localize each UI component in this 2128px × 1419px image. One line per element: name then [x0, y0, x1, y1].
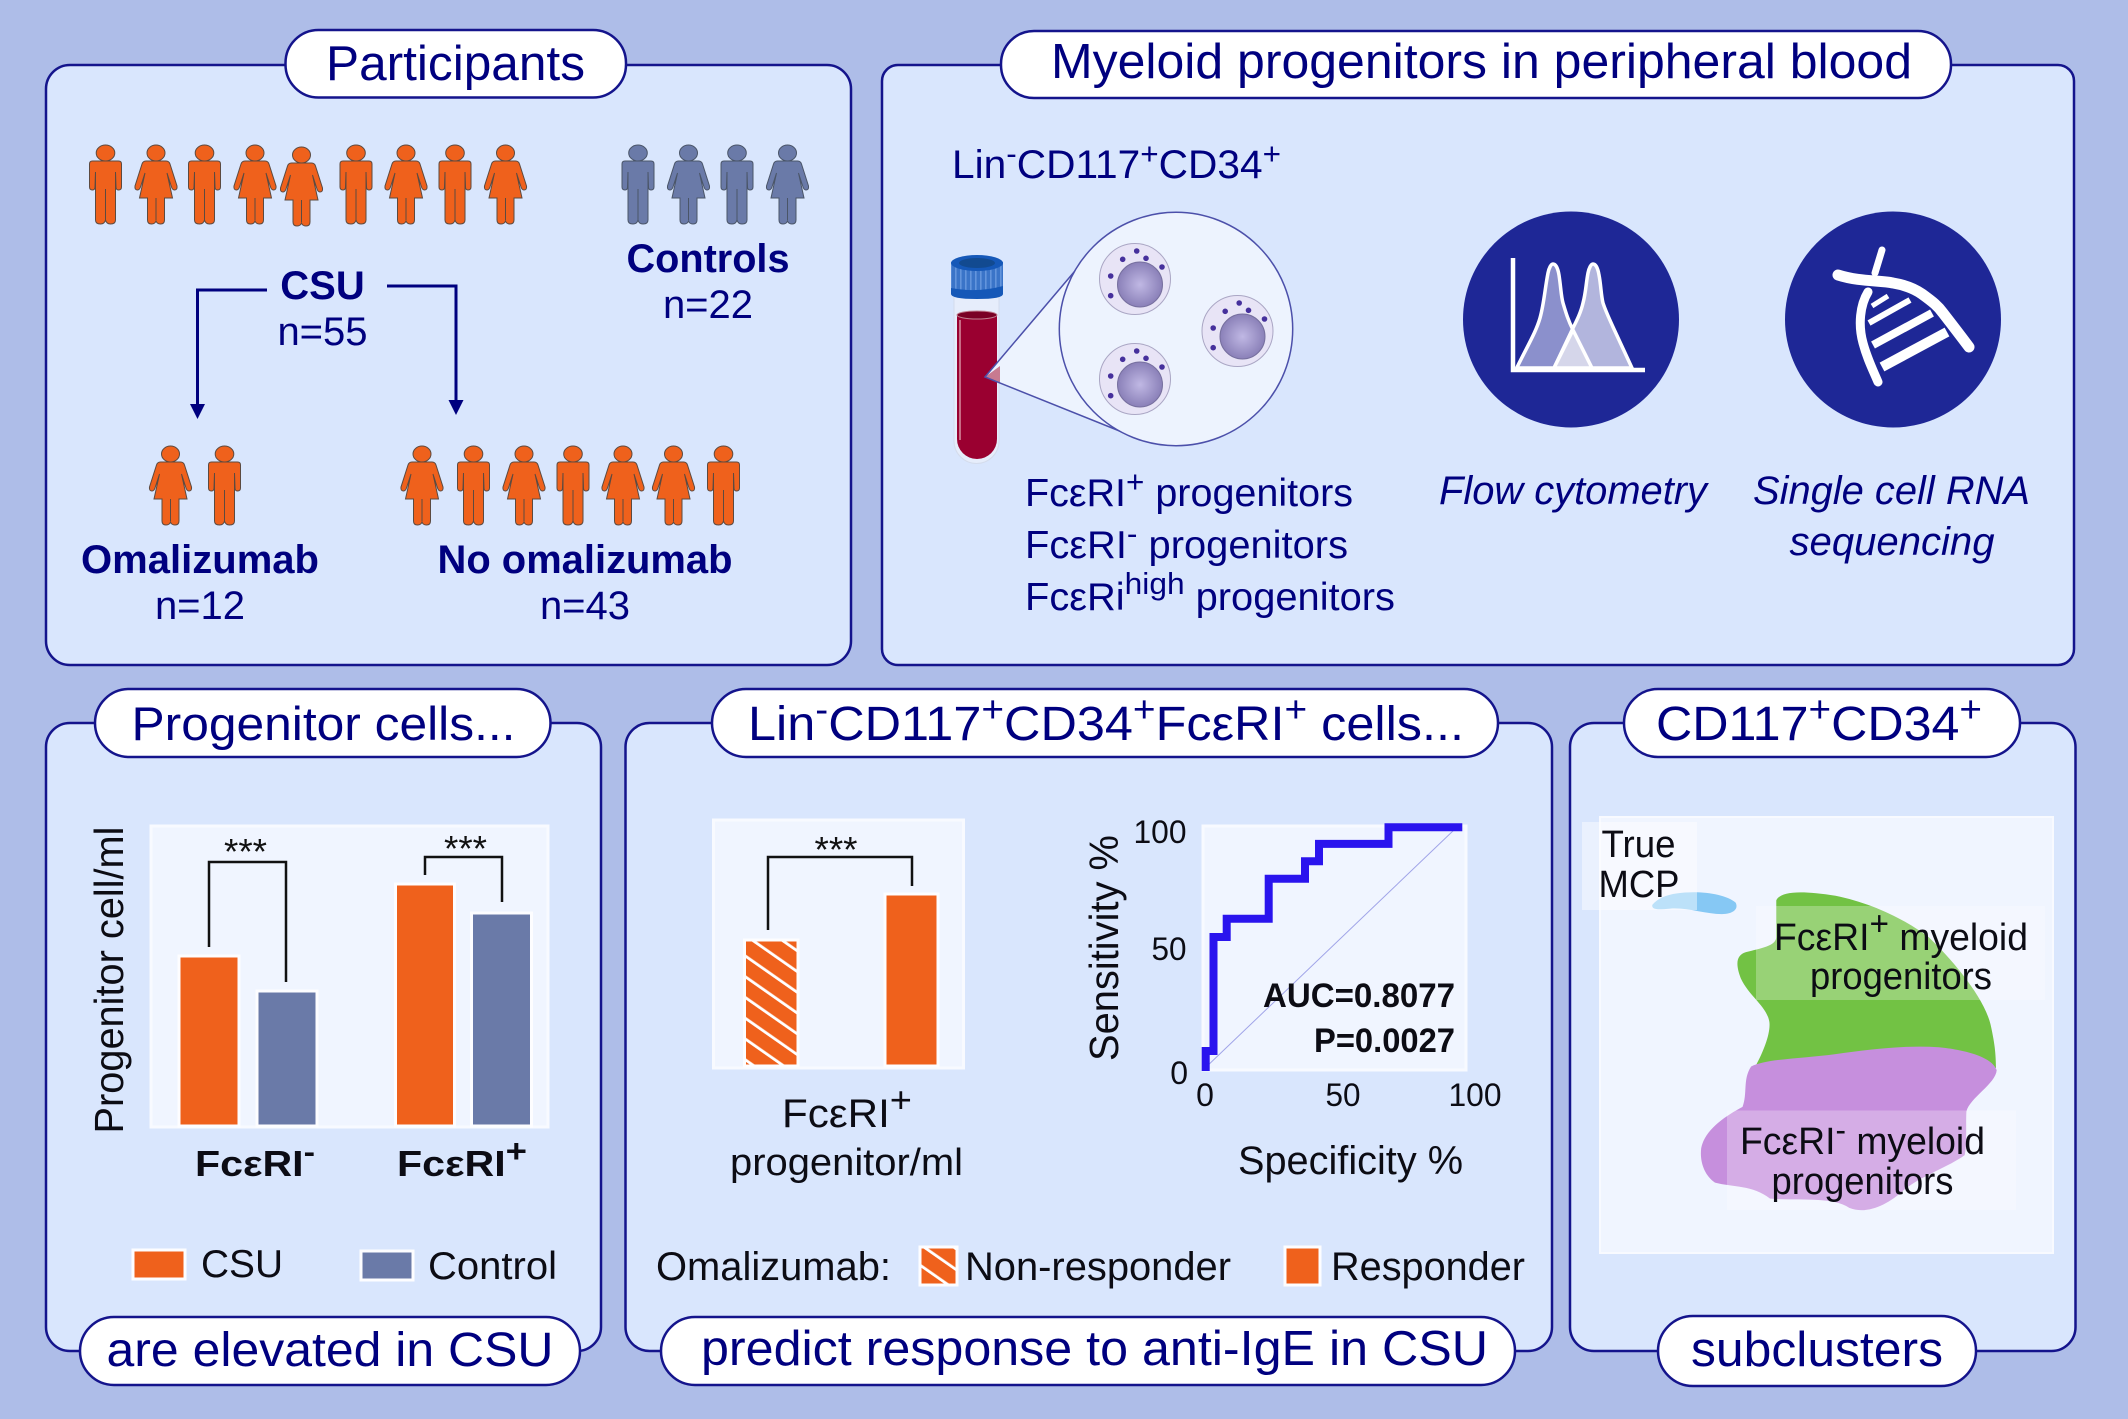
icons: controls [622, 145, 809, 224]
label: no omalizumab: n=43 [540, 584, 630, 628]
bar chart: progenitor counts: *** [224, 831, 267, 872]
heading: Lin-CD117+CD34+FceRI+ cells: + [1284, 689, 1307, 730]
label: no omalizumab [438, 538, 732, 628]
label: controls: n=22 [663, 283, 753, 327]
heading: Lin-CD117+CD34+FceRI+ cells: - [815, 689, 828, 730]
label: FceRI+ myeloid progenitors: + [1869, 905, 1889, 943]
ROC chart: 0 [1170, 1055, 1188, 1091]
ROC chart: AUC=0.8077 [1263, 977, 1455, 1015]
label: controls [626, 237, 790, 327]
axis label: FceRI+ progenitor/ml [730, 1079, 963, 1184]
footer: subclusters [1658, 1316, 1976, 1386]
panel: participants [46, 30, 851, 665]
legend: CSU [133, 1243, 283, 1286]
list: progenitor subtypes: - [1127, 516, 1137, 551]
ROC chart: 50 [1326, 1077, 1360, 1113]
label: controls: Controls [626, 237, 790, 281]
heading: CD117+CD34+ [1624, 689, 2020, 757]
bar chart: progenitor counts [151, 826, 548, 1127]
legend: control: Control [428, 1245, 557, 1288]
cluster: FceRI- [1701, 1047, 1997, 1210]
category label: FceRI minus: - [304, 1136, 315, 1169]
label: omalizumab: Omalizumab [81, 538, 319, 582]
list: progenitor subtypes: high [1125, 566, 1185, 601]
legend: omalizumab responders [656, 1245, 1525, 1289]
heading: Lin-CD117+CD34+FceRI+ cells: cells... [1307, 698, 1464, 751]
axis label: FceRI+ progenitor/ml: FcεRI [782, 1092, 884, 1136]
footer: are elevated in CSU: are elevated in CSU [106, 1324, 554, 1377]
label: CSU: CSU [280, 264, 365, 308]
label: omalizumab [81, 538, 319, 628]
heading: CD117+CD34+: CD117 [1656, 698, 1802, 751]
category label: FceRI plus: + [506, 1133, 527, 1169]
heading: progenitor cells: Progenitor cells... [132, 697, 516, 750]
list: progenitor subtypes: progenitors [1137, 524, 1348, 567]
label: FceRI+ myeloid progenitors [1756, 905, 2045, 1000]
axis label: FceRI+ progenitor/ml: progenitor/ml [730, 1142, 963, 1184]
heading: progenitor cells [95, 689, 550, 757]
footer: are elevated in CSU [80, 1317, 580, 1385]
panel: subclusters [1570, 689, 2076, 1386]
ROC chart: P=0.0027 [1314, 1022, 1455, 1060]
panel: progenitor cells [46, 689, 601, 1385]
label: single cell RNA sequencing: sequencing [1790, 520, 1994, 564]
heading: Lin-CD117+CD34+FceRI+ cells: FcεRI [1156, 698, 1284, 751]
axis label: specificity: Specificity % [1238, 1139, 1463, 1183]
ROC chart [1134, 814, 1502, 1113]
label: cell phenotype: Lin [952, 143, 1005, 187]
label: FceRI+ myeloid progenitors: myeloid [1889, 917, 2028, 959]
icon: magnified cells [985, 212, 1293, 446]
heading: Lin-CD117+CD34+FceRI+ cells: Lin [748, 698, 812, 751]
icon: blood tube [951, 255, 1003, 464]
cluster: FceRI+ [1737, 892, 1996, 1068]
panel: FceRI+ cells [626, 689, 1552, 1385]
label: cell phenotype: + [1263, 136, 1281, 171]
cluster plot [1600, 817, 2053, 1253]
list: progenitor subtypes: FcεRi [1025, 576, 1123, 619]
axis label: progenitor cell/ml: Progenitor cell/ml [86, 826, 132, 1134]
heading: Lin-CD117+CD34+FceRI+ cells: + [1133, 689, 1156, 730]
heading: participants [286, 30, 626, 98]
heading: Lin-CD117+CD34+FceRI+ cells: + [981, 689, 1004, 730]
label: FceRI+ myeloid progenitors: FcεRI [1774, 917, 1871, 959]
heading: CD117+CD34+: CD34 [1831, 698, 1959, 751]
list: progenitor subtypes: progenitors [1144, 472, 1353, 515]
icons: no omalizumab group [401, 446, 740, 525]
icons: omalizumab group [149, 446, 240, 525]
list: progenitor subtypes: progenitors [1185, 576, 1395, 619]
label: FceRI- myeloid progenitors [1727, 1110, 2016, 1210]
label: FceRI- myeloid progenitors: - [1835, 1112, 1846, 1148]
label: cell phenotype: - [1006, 136, 1017, 171]
arrow: CSU to omalizumab [190, 290, 267, 419]
arrow: CSU to no omalizumab [387, 286, 464, 415]
label: cell phenotype: CD34 [1159, 143, 1263, 187]
cluster: true MCP [1652, 892, 1737, 914]
category label: FceRI minus: FcεRI [195, 1143, 290, 1184]
legend: omalizumab responders: Responder [1331, 1245, 1525, 1289]
footer: predict response: predict response to anti-IgE in CSU [701, 1322, 1488, 1376]
icons: CSU participants [90, 145, 527, 226]
legend: omalizumab responders: Omalizumab: [656, 1245, 891, 1289]
category label: FceRI plus: FcεRI [397, 1143, 492, 1184]
label: cell phenotype: CD117 [1017, 143, 1140, 187]
list: progenitor subtypes: + [1126, 464, 1144, 499]
label: omalizumab: n=12 [155, 584, 245, 628]
legend: CSU: CSU [201, 1243, 283, 1286]
label: FceRI- myeloid progenitors: progenitors [1772, 1161, 1954, 1203]
label: CSU: n=55 [277, 310, 368, 354]
bar chart: responder comparison: *** [814, 829, 858, 870]
list: progenitor subtypes: FcεRI [1025, 524, 1125, 567]
label: no omalizumab: No omalizumab [438, 538, 732, 582]
label: FceRI- myeloid progenitors: FcεRI [1740, 1121, 1837, 1163]
heading: Lin-CD117+CD34+FceRI+ cells: CD34 [1004, 698, 1133, 751]
axis label: FceRI+ progenitor/ml: + [890, 1079, 912, 1120]
label: single cell RNA sequencing: Single cell RNA [1753, 469, 2030, 513]
heading: CD117+CD34+: + [1809, 689, 1831, 730]
label: single cell RNA sequencing [1753, 469, 2030, 564]
label: cell phenotype: + [1140, 136, 1159, 171]
panel: myeloid progenitors [882, 31, 2074, 665]
heading: Lin-CD117+CD34+FceRI+ cells: CD117 [828, 698, 981, 751]
label: flow cytometry: Flow cytometry [1439, 469, 1710, 513]
label: FceRI- myeloid progenitors: myeloid [1846, 1121, 1985, 1163]
bar chart: progenitor counts: *** [444, 828, 487, 869]
axis label: sensitivity: Sensitivity % [1081, 835, 1127, 1061]
icon: DNA strand [1785, 212, 2001, 428]
ROC chart: 100 [1134, 814, 1186, 850]
heading: CD117+CD34+: + [1959, 689, 1982, 730]
legend: omalizumab responders: Non-responder [965, 1245, 1231, 1289]
heading: myeloid progenitors: Myeloid progenitors in peripheral blood [1051, 35, 1912, 89]
label: true MCP [1582, 822, 1697, 910]
heading: Lin-CD117+CD34+FceRI+ cells [712, 689, 1498, 757]
icon: flow cytometry [1463, 212, 1679, 428]
ROC chart: 0 [1196, 1077, 1214, 1113]
ROC chart: 100 [1448, 1077, 1502, 1113]
footer: subclusters: subclusters [1691, 1323, 1943, 1377]
heading: participants: Participants [326, 37, 585, 91]
ROC chart: 50 [1152, 931, 1186, 967]
list: progenitor subtypes [1025, 464, 1395, 619]
label: true MCP: MCP [1598, 864, 1680, 906]
label: CSU [277, 264, 368, 354]
legend: control [361, 1245, 557, 1288]
label: FceRI+ myeloid progenitors: progenitors [1810, 956, 1992, 998]
label: true MCP: True [1602, 824, 1676, 866]
list: progenitor subtypes: FcεRI [1025, 472, 1125, 515]
bar chart: responder comparison [714, 820, 964, 1068]
